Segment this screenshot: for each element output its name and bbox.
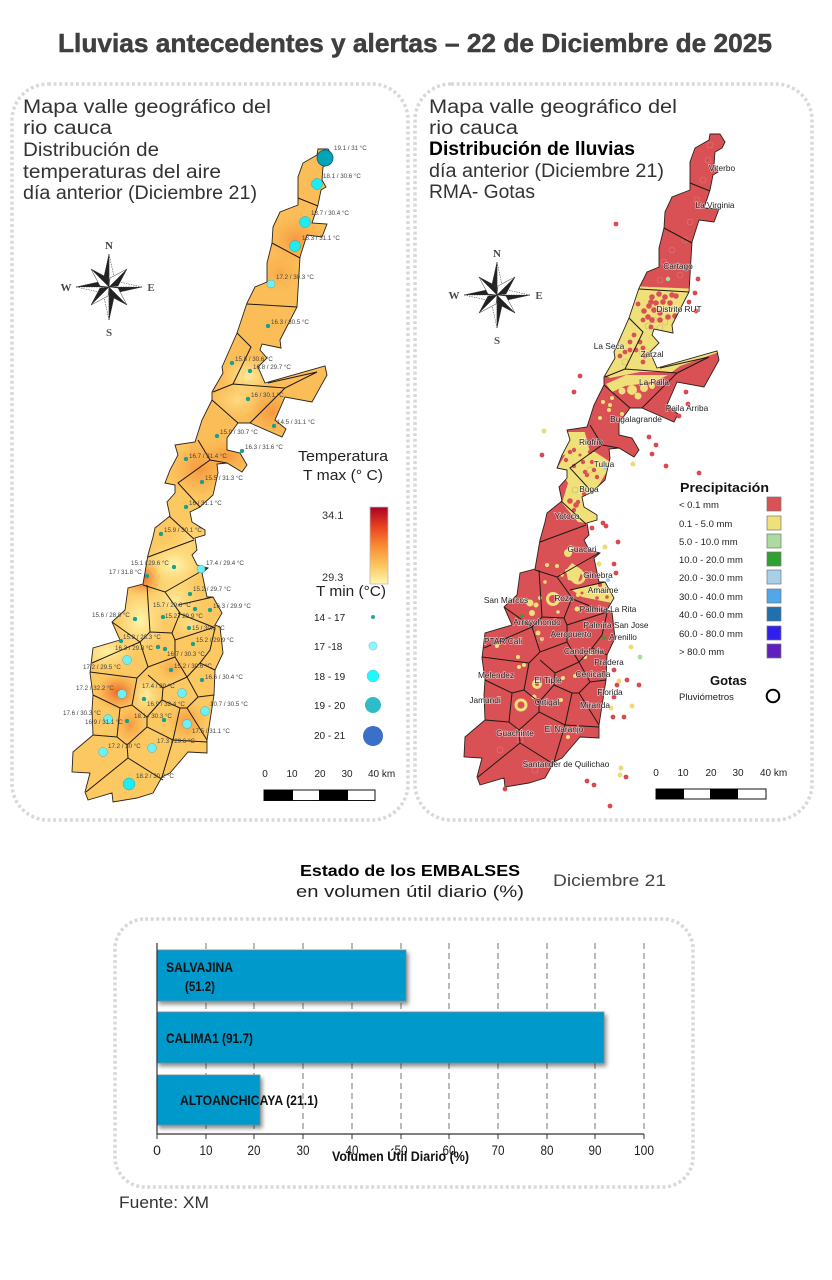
temperature stations: labels: 17.2 / 30 °C bbox=[108, 743, 141, 750]
bar: Calima1 bbox=[157, 1012, 604, 1063]
temperature stations: labels: 17.4 / 29.4 °C bbox=[206, 560, 244, 567]
place names on the rainfall map: Miranda bbox=[580, 700, 610, 710]
temperature stations: labels: 10.7 / 30.5 °C bbox=[210, 701, 248, 708]
bar: Altoanchicaya: ALTOANCHICAYA (21.1) bbox=[180, 1092, 318, 1108]
place names on the rainfall map: Jamundi bbox=[469, 695, 501, 705]
temperature stations: labels: 17.3 / 29.6 °C bbox=[157, 738, 195, 745]
place names on the rainfall map: El Naranjo bbox=[545, 724, 584, 734]
temperature stations: labels: 17.5 / 31.1 °C bbox=[192, 728, 230, 735]
place names on the rainfall map: Yotoco bbox=[554, 511, 580, 521]
temperature stations: labels: 17.2 / 32.2 °C bbox=[76, 685, 114, 692]
place names on the rainfall map: Rozo bbox=[554, 593, 574, 603]
legend: precipitation: 10.0 - 20.0 mm bbox=[679, 555, 743, 566]
legend: temperature max and min: T max (° C) bbox=[303, 467, 383, 484]
temperature stations: labels: 15.9 / 30.1 °C bbox=[164, 527, 202, 534]
temperature stations: labels: 16.9 / 31.1 °C bbox=[85, 719, 123, 726]
bar: Salvajina: (51.2) bbox=[185, 978, 215, 994]
temperature stations: labels: 16.8 / 29.7 °C bbox=[253, 364, 291, 371]
panel heading: temperature: Mapa valle geográfico del bbox=[23, 97, 271, 118]
place names on the rainfall map: Florida bbox=[597, 687, 623, 697]
place names on the rainfall map: Distrito RUT bbox=[656, 304, 702, 314]
temperature stations: labels: 15.7 / 29.6 °C bbox=[153, 602, 191, 609]
temperature stations: labels: 15.9 / 30.7 °C bbox=[220, 429, 258, 436]
chart axes and tick labels: 90 bbox=[588, 1142, 602, 1158]
temperature stations: labels: 17 / 31.8 °C bbox=[109, 569, 142, 576]
place names on the rainfall map: La Paila bbox=[639, 377, 669, 387]
icon: compass rose: E bbox=[147, 282, 155, 294]
temperature stations: labels: 16.3 / 29.8 °C bbox=[115, 645, 153, 652]
panel heading: rainfall: RMA- Gotas bbox=[429, 182, 535, 203]
place names on the rainfall map: Guacari bbox=[567, 544, 597, 554]
bar: Salvajina: SALVAJINA bbox=[166, 959, 233, 975]
panel heading: rainfall: día anterior (Diciembre 21) bbox=[429, 161, 664, 182]
scale bar: temperature map: 0 bbox=[262, 769, 268, 780]
place names on the rainfall map: Guachinte bbox=[496, 728, 534, 738]
place names on the rainfall map: Cartago bbox=[663, 261, 693, 271]
panel heading: rainfall: Mapa valle geográfico del bbox=[429, 97, 677, 118]
rain gauge dots outside the map bbox=[503, 222, 701, 808]
place names on the rainfall map: PTAR Cali bbox=[484, 636, 522, 646]
temperature stations: labels: 18.3 / 31.1 °C bbox=[302, 235, 340, 242]
colour bar bbox=[370, 507, 388, 584]
place names on the rainfall map: La Seca bbox=[594, 341, 625, 351]
legend: temperature max and min: T min (°C) bbox=[316, 583, 386, 600]
icon: compass rose bbox=[448, 248, 543, 347]
legend: temperature max and min: 14 - 17 bbox=[314, 613, 346, 624]
legend: temperature max and min: Temperatura bbox=[298, 448, 389, 465]
legend: precipitation: Pluviómetros bbox=[679, 692, 734, 703]
legend: temperature max and min: 19 - 20 bbox=[314, 701, 346, 712]
chart axes and tick labels: 100 bbox=[634, 1142, 654, 1158]
legend: precipitation: Gotas bbox=[710, 673, 747, 688]
temperature stations: labels: 18.2 / 30.2 °C bbox=[136, 773, 174, 780]
legend: temperature max and min: 20 - 21 bbox=[314, 731, 346, 742]
place names on the rainfall map: Palmira La Rita bbox=[580, 604, 637, 614]
scale bar: temperature map: 10 bbox=[286, 769, 298, 780]
panel heading: rainfall: rio cauca bbox=[429, 118, 518, 139]
panel heading: temperature: rio cauca bbox=[23, 118, 112, 139]
panel heading: rainfall: Distribución de lluvias bbox=[429, 139, 635, 160]
panel heading: temperature: día anterior (Diciembre 21) bbox=[23, 183, 257, 204]
temperature stations: labels: 15.2 / 30.6 °C bbox=[174, 663, 212, 670]
scale bar: temperature map: 20 bbox=[314, 769, 326, 780]
temperature stations: labels: 16.3 / 29.9 °C bbox=[213, 603, 251, 610]
scale bar: rainfall map: 20 bbox=[705, 768, 717, 779]
panel: reservoir bar chart bbox=[115, 919, 693, 1187]
temperature stations: dots bbox=[98, 150, 333, 790]
chart axes and tick labels: 20 bbox=[248, 1142, 261, 1158]
place names on the rainfall map: Santander de Quilichao bbox=[523, 759, 610, 769]
legend: temperature max and min bbox=[298, 448, 389, 746]
place names on the rainfall map: Bugalagrande bbox=[610, 414, 662, 424]
temperature stations: labels: 16 / 30.1 °C bbox=[251, 392, 284, 399]
legend: temperature max and min: 29.3 bbox=[322, 572, 343, 584]
chart axes and tick labels: 10 bbox=[200, 1142, 213, 1158]
scale bar: rainfall map: 0 bbox=[653, 768, 659, 779]
rainfall map of the valley bbox=[464, 134, 726, 788]
legend: precipitation: 20.0 - 30.0 mm bbox=[679, 573, 743, 584]
chart axes and tick labels: 30 bbox=[296, 1142, 310, 1158]
temperature stations: labels: 16.7 / 30.3 °C bbox=[167, 651, 205, 658]
temperature stations: labels: 16.3 / 30.5 °C bbox=[271, 319, 309, 326]
temperature stations: labels bbox=[63, 145, 367, 780]
chart axes and tick labels: 60 bbox=[442, 1142, 456, 1158]
legend: temperature max and min: 34.1 bbox=[322, 510, 343, 522]
place names on the rainfall map: Tulua bbox=[594, 459, 615, 469]
source note: Fuente: XM bbox=[119, 1193, 209, 1212]
icon: compass rose: N bbox=[105, 240, 113, 252]
panel heading: temperature: Distribución de bbox=[23, 140, 159, 161]
scale bar: temperature map: 40 km bbox=[368, 769, 395, 780]
chart axes and tick labels: Volumen Útil Diario (%) bbox=[332, 1147, 469, 1164]
legend: precipitation: 30.0 - 40.0 mm bbox=[679, 592, 743, 603]
reservoir chart heading: en volumen útil diario (%) bbox=[296, 882, 524, 901]
legend: precipitation: > 80.0 mm bbox=[679, 647, 724, 658]
title: Lluvias antecedentes y alertas – 22 de Diciembre de 2025 bbox=[58, 28, 772, 58]
chart axes and tick labels bbox=[153, 943, 654, 1164]
temperature stations: labels: 18.1 / 30.6 °C bbox=[323, 173, 361, 180]
place names on the rainfall map: Viterbo bbox=[709, 163, 735, 173]
chart axes and tick labels: 0 bbox=[153, 1142, 161, 1158]
panel: rainfall map bbox=[415, 84, 812, 820]
temperature stations: labels: 15.8 / 28.3 °C bbox=[123, 634, 161, 641]
place names on the rainfall map: Paila Arriba bbox=[666, 403, 709, 413]
scale bar: rainfall map bbox=[653, 768, 787, 799]
legend: precipitation: 60.0 - 80.0 mm bbox=[679, 629, 743, 640]
place names on the rainfall map: Candelaria bbox=[564, 646, 604, 656]
place names on the rainfall map: La Virginia bbox=[695, 200, 735, 210]
temperature stations: labels: 17.2 / 30.3 °C bbox=[276, 274, 314, 281]
chart axes and tick labels: 40 bbox=[346, 1142, 359, 1158]
scale bar: rainfall map: 30 bbox=[732, 768, 744, 779]
place names on the rainfall map: Cenicaña bbox=[575, 669, 611, 679]
temperature stations: labels: 15.8 / 30.6 °C bbox=[235, 356, 273, 363]
place names on the rainfall map: Melendez bbox=[478, 670, 514, 680]
place names on the rainfall map: Aeropuerto bbox=[550, 629, 592, 639]
place names on the rainfall map: Zarzal bbox=[640, 349, 664, 359]
legend: temperature max and min: 18 - 19 bbox=[314, 672, 346, 683]
legend: precipitation: 40.0 - 60.0 mm bbox=[679, 610, 743, 621]
legend: temperature max and min: 17 -18 bbox=[314, 642, 343, 653]
chart axes and tick labels: 50 bbox=[394, 1142, 408, 1158]
icon: compass rose: W bbox=[448, 290, 460, 302]
temperature stations: labels: 16.3 / 31.6 °C bbox=[245, 444, 283, 451]
place names on the rainfall map: El Tiple bbox=[534, 675, 562, 685]
scale bar: rainfall map: 10 bbox=[677, 768, 689, 779]
temperature stations: labels: 17.2 / 29.5 °C bbox=[83, 664, 121, 671]
temperature stations: labels: 15.2 / 29.9 °C bbox=[165, 613, 203, 620]
icon: compass rose: S bbox=[494, 335, 500, 347]
scale bar: rainfall map: 40 km bbox=[760, 768, 787, 779]
icon: compass rose: S bbox=[106, 327, 112, 339]
place names on the rainfall map: Buga bbox=[579, 484, 599, 494]
temperature map of the valley bbox=[60, 140, 340, 810]
temperature stations: labels: 19.1 / 31 °C bbox=[334, 145, 367, 152]
panel heading: temperature bbox=[23, 97, 271, 204]
place names on the rainfall map bbox=[469, 163, 735, 769]
temperature stations: labels: 15 / 30.3 °C bbox=[192, 625, 225, 632]
place names on the rainfall map: Amaime bbox=[588, 585, 619, 595]
temperature stations: labels: 16.9 / 32.4 °C bbox=[147, 701, 185, 708]
temperature stations: labels: 16 / 31.1 °C bbox=[189, 500, 222, 507]
temperature stations: labels: 18.7 / 30.4 °C bbox=[311, 210, 349, 217]
place names on the rainfall map: Palmira San Jose bbox=[583, 620, 649, 630]
chart axes and tick labels: 80 bbox=[540, 1142, 554, 1158]
panel heading: temperature: temperaturas del aire bbox=[23, 162, 221, 183]
temperature stations: labels: 18.1 / 30.3 °C bbox=[134, 713, 172, 720]
place names on the rainfall map: Arroyohondo bbox=[513, 617, 561, 627]
bar: Altoanchicaya bbox=[157, 1075, 318, 1125]
temperature stations: labels: 17.6 / 30.3 °C bbox=[63, 710, 101, 717]
chart axes and tick labels: 70 bbox=[492, 1142, 505, 1158]
icon: compass rose: N bbox=[493, 248, 501, 260]
legend: precipitation: 0.1 - 5.0 mm bbox=[679, 519, 732, 530]
temperature stations: labels: 14.5 / 31.1 °C bbox=[277, 419, 315, 426]
legend: precipitation bbox=[679, 480, 781, 703]
panel heading: rainfall bbox=[429, 97, 677, 203]
temperature stations: labels: 16.6 / 30.4 °C bbox=[205, 674, 243, 681]
place names on the rainfall map: Riofrio bbox=[579, 437, 603, 447]
temperature stations: labels: 16.7 / 31.4 °C bbox=[189, 453, 227, 460]
place names on the rainfall map: Arenillo bbox=[609, 632, 637, 642]
temperature stations: labels: 15.6 / 28.9 °C bbox=[92, 612, 130, 619]
scale bar: temperature map: 30 bbox=[341, 769, 353, 780]
icon: compass rose: W bbox=[60, 282, 72, 294]
temperature stations: labels: 15.5 / 31.3 °C bbox=[205, 475, 243, 482]
reservoir chart heading bbox=[296, 863, 524, 901]
temperature stations: labels: 15.2 / 29.7 °C bbox=[193, 586, 231, 593]
legend: precipitation: Precipitación bbox=[680, 480, 769, 495]
place names on the rainfall map: Pradera bbox=[594, 657, 624, 667]
place names on the rainfall map: Ortigal bbox=[535, 697, 559, 707]
reservoir chart heading: Estado de los EMBALSES bbox=[300, 863, 520, 880]
temperature stations: labels: 15.2 / 29.9 °C bbox=[196, 637, 234, 644]
legend: precipitation: 5.0 - 10.0 mm bbox=[679, 537, 738, 548]
bar: Calima1: CALIMA1 (91.7) bbox=[166, 1030, 253, 1046]
legend: precipitation: < 0.1 mm bbox=[679, 500, 719, 511]
bar: Salvajina bbox=[157, 950, 406, 1001]
panel: temperature map bbox=[12, 84, 408, 820]
chart date: Diciembre 21 bbox=[553, 871, 666, 890]
place names on the rainfall map: Ginebra bbox=[583, 570, 613, 580]
temperature stations: labels: 15.1 / 29.6 °C bbox=[131, 560, 169, 567]
scale bar: temperature map bbox=[262, 769, 395, 800]
icon: compass rose bbox=[60, 240, 155, 339]
icon: compass rose: E bbox=[535, 290, 543, 302]
place names on the rainfall map: San Marcos bbox=[484, 595, 528, 605]
temperature stations: labels: 17.4 / 30 °C bbox=[142, 683, 175, 690]
